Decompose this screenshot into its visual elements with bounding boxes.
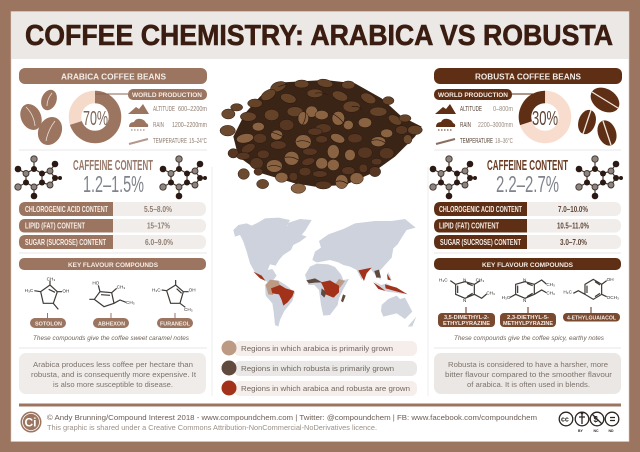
robusta chemistry table: CHLOROGENIC ACID CONTENT [439,205,522,214]
molecule: 4-ethylguaiacol: OH [607,277,614,282]
molecule: abhexon [89,281,135,307]
icon: creative commons licence [559,412,619,433]
arabica description [19,353,206,394]
label: 3,5-dimethyl-2-ethylpyrazine: ETHYLPYRAZINE [443,321,491,327]
label: sotolon: SOTOLON [35,322,62,328]
arabica flavour note: These compounds give the coffee sweet caramel notes [33,336,189,342]
molecule: 4-ethylguaiacol: OCH₃ [607,295,619,300]
robusta flavour heading [434,258,621,270]
map: coffee growing regions [233,218,416,327]
label: 4-ethylguaiacol [563,307,620,322]
icon: mountain [435,104,456,114]
credits [47,413,537,432]
arabica growing conditions: 15–24°C [189,137,207,145]
legend: both: Regions in which arabica and robusta are grown [241,384,410,393]
robusta description: of arabica. It is often used in blends. [467,380,590,389]
world production label: WORLD PRODUCTION [132,92,202,99]
world production label [434,89,512,100]
icon: thermometer [129,139,148,144]
robusta growing conditions: RAIN [460,122,471,129]
robusta growing conditions: 2200–3000mm [478,122,513,129]
land masses [233,218,416,327]
icon: arabica coffee beans [16,88,67,149]
arabica description: Arabica produces less coffee per hectare than [33,360,193,369]
logo: compound interest: Ci [24,416,36,430]
icon: rain cloud [129,119,148,130]
icon: robusta coffee beans [575,82,624,148]
robusta chemistry table [434,202,621,249]
arabica chemistry table [19,202,206,249]
robusta growing conditions: 18–36°C [495,137,513,145]
arabica chemistry table: 5.5–8.0% [144,205,173,214]
arabica chemistry table: 15–17% [147,222,171,230]
molecule: 4-ethylguaiacol [563,277,619,300]
molecule: 3,5-dimethyl-2-ethylpyrazine: N [463,277,466,282]
arabica heading [19,68,207,84]
arabica caffeine content: 1.2–1.5% [83,171,144,197]
both regions [253,268,408,306]
label: abhexon [93,313,129,328]
robusta chemistry table: 3.0–7.0% [560,238,588,247]
icon: caffeine molecule right [160,156,207,199]
title [12,12,628,59]
molecule: abhexon: CH₃ [117,285,125,290]
icon: mountain [128,104,149,114]
label: 2,3-diethyl-5-methylpyrazine: METHYLPYRAZINE [503,321,554,327]
icon: caffeine molecule left [430,156,477,199]
arabica flavour heading: KEY FLAVOUR COMPOUNDS [68,262,159,269]
robusta caffeine content: CAFFEINE CONTENT [487,158,568,174]
molecule: 3,5-dimethyl-2-ethylpyrazine: CH₃ [486,291,495,296]
panel: arabica [15,68,207,394]
robusta heading: ROBUSTA COFFEE BEANS [475,72,581,82]
robusta heading [434,68,622,84]
label: furaneol: FURANEOL [160,322,191,328]
arabica growing conditions: 600–2200m [178,106,207,113]
credits: © Andy Brunning/Compound Interest 2018 - www.compoundchem.com | Twitter: @compoundchem | FB: www.facebook.com/compoundchem [47,413,537,422]
molecule: sotolon [25,277,69,309]
footer [19,404,621,433]
label: sotolon [30,313,66,328]
label: 3,5-dimethyl-2-ethylpyrazine: 3,5-DIMETHYL-2- [444,315,489,321]
robusta chemistry table: SUGAR (SUCROSE) CONTENT [440,238,521,247]
icon: caffeine molecule left [15,156,62,199]
label: abhexon: ABHEXON [98,322,125,328]
icon: creative commons licence: cc [561,416,569,424]
icon: creative commons licence: ND [608,429,614,433]
arabica growing conditions [153,106,207,145]
label: 4-ethylguaiacol: 4-ETHYLGUAIACOL [567,316,616,322]
label: 2,3-diethyl-5-methylpyrazine [500,307,556,327]
molecule: 3,5-dimethyl-2-ethylpyrazine: H₃C [439,277,448,282]
icon: caffeine molecule right [576,156,623,199]
arabica chemistry table: 6.0–9.0% [145,238,174,247]
robusta description: bitter flavour compared to the smoother flavour [445,370,613,379]
robusta growing conditions: ALTITUDE [460,106,482,113]
legend: arabica [222,340,417,356]
molecule: 3,5-dimethyl-2-ethylpyrazine: N [463,298,466,303]
arabica growing conditions: RAIN [153,122,164,129]
robusta description [434,353,621,394]
icon: rain cloud [436,119,455,130]
label: furaneol [157,313,193,328]
molecule: abhexon: CH₃ [126,300,135,305]
molecule: 2,3-diethyl-5-methylpyrazine: CH₃ [546,291,555,296]
molecule: furaneol [152,280,196,312]
molecule: furaneol: OH [189,288,196,293]
label: 2,3-diethyl-5-methylpyrazine: 2,3-DIETHYL-5- [507,315,549,321]
logo: compound interest [20,412,42,432]
arabica chemistry table: SUGAR (SUCROSE) CONTENT [25,238,106,247]
image: coffee bean pile [220,78,422,193]
map legend [222,340,417,396]
arabica description: is also more susceptible to disease. [53,380,173,389]
robusta regions [306,270,381,302]
arabica chemistry table: CHLOROGENIC ACID CONTENT [25,205,108,214]
donut: arabica 70%: 70% [83,108,108,130]
arabica description: robusta, and is consequently more expensive. It [31,370,197,379]
molecule: furaneol: H₃C [152,287,161,292]
donut: arabica 70% [75,94,128,137]
icon: creative commons licence: NC [594,429,599,433]
molecule: sotolon: OH [62,288,69,293]
arabica flavour heading [19,258,206,270]
world production label: WORLD PRODUCTION [438,92,508,99]
molecule: 2,3-diethyl-5-methylpyrazine: H₃C [502,295,511,300]
legend: both [222,380,417,396]
molecule: furaneol: CH₃ [184,307,193,312]
donut: robusta 30%: 30% [532,108,558,130]
arabica growing conditions: TEMPERATURE [153,138,187,145]
molecule: 4-ethylguaiacol: H₃C [563,289,573,294]
panel: robusta [430,68,624,394]
molecule: 2,3-diethyl-5-methylpyrazine: CH₃ [546,282,555,287]
robusta flavour heading: KEY FLAVOUR COMPOUNDS [482,262,574,269]
arabica growing conditions: ALTITUDE [153,106,175,113]
arabica flavour molecules [25,277,196,312]
legend: robusta: Regions in which robusta is primarily grown [241,364,394,373]
label: 3,5-dimethyl-2-ethylpyrazine [438,307,495,327]
molecule: sotolon: H₃C [25,288,34,293]
title: COFFEE CHEMISTRY: ARABICA VS ROBUSTA [25,20,613,52]
molecule: 2,3-diethyl-5-methylpyrazine: N [523,277,526,282]
robusta caffeine content [487,158,568,197]
robusta flavour note: These compounds give the coffee spicy, earthy notes [454,336,604,342]
arabica regions [266,279,345,298]
world production label [128,89,207,100]
molecule: 2,3-diethyl-5-methylpyrazine: N [523,298,526,303]
molecule: abhexon: HO [92,281,100,286]
robusta flavour molecules [439,277,619,303]
arabica caffeine content: CAFFEINE CONTENT [73,158,153,174]
arabica chemistry table: LIPID (FAT) CONTENT [25,222,85,230]
robusta growing conditions: 0–800m [493,106,513,113]
molecule: sotolon: CH₃ [47,277,55,282]
arabica growing conditions: 1200–2200mm [172,122,207,129]
legend: arabica: Regions in which arabica is primarily grown [241,344,393,353]
molecule: 3,5-dimethyl-2-ethylpyrazine: CH₃ [476,277,484,282]
robusta growing conditions: TEMPERATURE [460,138,493,145]
robusta chemistry table: 7.0–10.0% [558,205,589,214]
icon: creative commons licence: $ [594,415,598,424]
molecule: 3,5-dimethyl-2-ethylpyrazine [439,277,495,303]
icon: creative commons licence: BY [578,429,584,433]
legend: robusta [222,360,417,376]
credits: This graphic is shared under a Creative Commons Attribution-NonCommercial-NoDerivatives licence. [47,423,377,432]
robusta growing conditions [460,106,513,145]
icon: thermometer [436,139,455,144]
robusta description: Robusta is considered to have a harsher, more [448,360,608,369]
arabica heading: ARABICA COFFEE BEANS [61,72,166,82]
arabica caffeine content [73,158,153,197]
robusta chemistry table: LIPID (FAT) CONTENT [439,222,499,230]
robusta chemistry table: 10.5–11.0% [557,222,590,230]
molecule: 2,3-diethyl-5-methylpyrazine [502,277,555,303]
robusta caffeine content: 2.2–2.7% [496,171,559,197]
donut: robusta 30% [512,92,570,142]
